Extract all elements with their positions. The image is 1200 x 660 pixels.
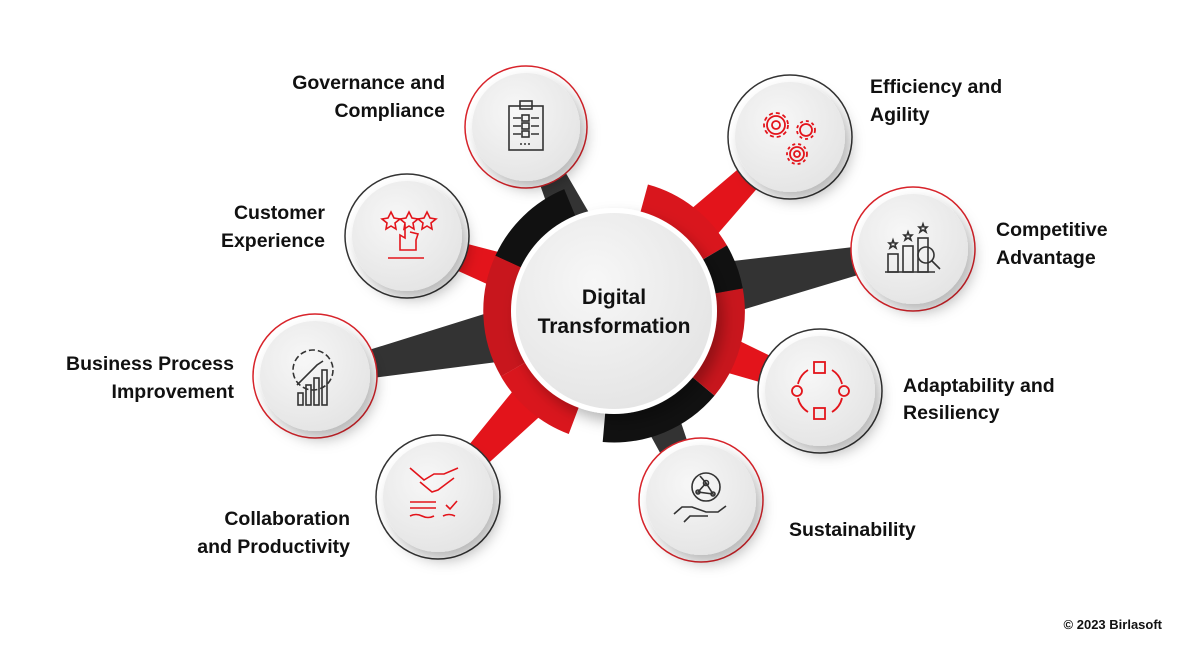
icon: stars hand bbox=[382, 212, 436, 258]
label: business bbox=[66, 353, 234, 403]
icon: cycle bbox=[792, 362, 849, 419]
satellite: governance bbox=[465, 66, 587, 188]
label: collaboration: and Productivity bbox=[197, 536, 350, 558]
icon: gear chart bbox=[293, 350, 333, 405]
label: efficiency: Agility bbox=[870, 104, 930, 126]
spoke: governance bbox=[505, 118, 639, 323]
label: customer: Experience bbox=[221, 230, 325, 252]
satellite: customer bbox=[345, 174, 469, 298]
label: collaboration: Collaboration bbox=[224, 508, 350, 530]
spokes bbox=[307, 117, 920, 518]
label: competitive bbox=[996, 219, 1108, 269]
label: sustainability: Sustainability bbox=[789, 519, 916, 541]
icon: globe hand bbox=[674, 473, 726, 522]
satellite: efficiency bbox=[728, 75, 852, 199]
label: governance: Governance and bbox=[292, 72, 445, 94]
icon: gears bbox=[764, 113, 815, 164]
label: business: Improvement bbox=[112, 381, 234, 403]
satellite: adaptability bbox=[758, 329, 882, 453]
center circle bbox=[511, 208, 717, 414]
icon: bars magnifier bbox=[885, 224, 940, 272]
label: efficiency bbox=[870, 76, 1002, 126]
spoke: adaptability bbox=[604, 285, 830, 416]
ring segments bbox=[498, 199, 730, 427]
label: collaboration bbox=[197, 508, 350, 558]
center title: Digital bbox=[582, 286, 646, 309]
spoke: sustainability bbox=[588, 300, 726, 518]
label: adaptability: Resiliency bbox=[903, 402, 1000, 424]
satellite: collaboration bbox=[376, 435, 500, 559]
label: governance bbox=[292, 72, 445, 122]
icon: handshake bbox=[410, 468, 458, 518]
label: adaptability: Adaptability and bbox=[903, 375, 1055, 397]
label: competitive: Competitive bbox=[996, 219, 1108, 241]
label: competitive: Advantage bbox=[996, 247, 1096, 269]
satellite: competitive bbox=[851, 187, 975, 311]
spoke: efficiency bbox=[594, 117, 809, 331]
label: efficiency: Efficiency and bbox=[870, 76, 1002, 98]
satellite: sustainability bbox=[639, 438, 763, 562]
spoke: business bbox=[307, 276, 622, 411]
label: customer: Customer bbox=[234, 202, 325, 224]
label: governance: Compliance bbox=[334, 100, 445, 122]
label: business: Business Process bbox=[66, 353, 234, 375]
center circle: Transformation bbox=[538, 315, 690, 338]
spoke: customer bbox=[395, 211, 623, 337]
label: customer bbox=[221, 202, 325, 252]
icon: clipboard bbox=[509, 101, 543, 150]
spoke: collaboration bbox=[418, 292, 634, 516]
copyright: © 2023 Birlasoft bbox=[1064, 617, 1163, 632]
satellite: business bbox=[253, 314, 377, 438]
spoke: competitive bbox=[607, 214, 920, 346]
label: adaptability bbox=[903, 375, 1055, 424]
